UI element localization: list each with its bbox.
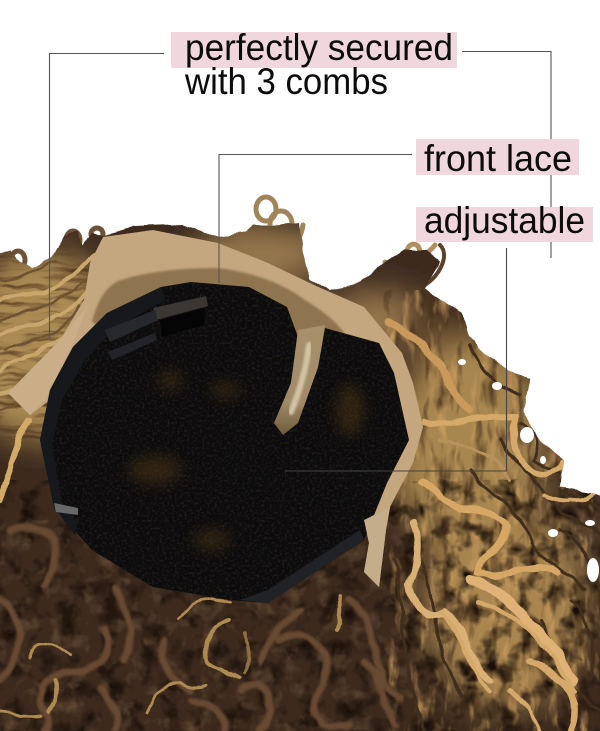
callout: perfectly secured with 3 combs	[171, 27, 457, 102]
hair colour zones	[0, 225, 600, 710]
lower brown curls	[0, 528, 400, 731]
callout: adjustable: adjustable	[424, 200, 585, 241]
line: adjustable	[285, 248, 506, 471]
comb clip at lower left	[54, 503, 78, 515]
lace part	[274, 325, 325, 435]
line: combs right	[462, 52, 551, 258]
hair mass	[0, 222, 600, 731]
callout: front lace: front lace	[424, 138, 572, 179]
callout: perfectly secured with 3 combs: perfectly secured	[185, 27, 453, 68]
cap bottom band	[240, 530, 364, 603]
right blond strands	[388, 322, 598, 731]
lace flap lower right	[364, 507, 390, 587]
golden highlights on brown	[0, 597, 341, 716]
curl: left small	[11, 228, 103, 269]
line: combs left	[50, 54, 164, 338]
lace band	[8, 230, 423, 587]
top curls	[11, 197, 444, 285]
cap mesh texture	[40, 282, 410, 603]
wig cap	[40, 282, 410, 603]
hair strand texture	[0, 235, 110, 450]
curl: center top	[256, 197, 303, 243]
cap edge band	[40, 287, 165, 535]
callout: perfectly secured with 3 combs: with 3 combs	[184, 61, 388, 102]
white gaps in hair	[458, 359, 599, 582]
left blond strands	[0, 255, 95, 500]
comb	[105, 296, 208, 360]
curl: right top	[385, 244, 444, 285]
lace outer	[8, 230, 423, 587]
right dark strands	[395, 345, 600, 731]
part highlight	[291, 345, 309, 412]
cap brown flecks	[129, 371, 364, 550]
lace left flap	[8, 305, 88, 415]
lace top shading	[92, 268, 345, 350]
callout lines	[50, 52, 551, 471]
line: front lace	[219, 154, 412, 283]
